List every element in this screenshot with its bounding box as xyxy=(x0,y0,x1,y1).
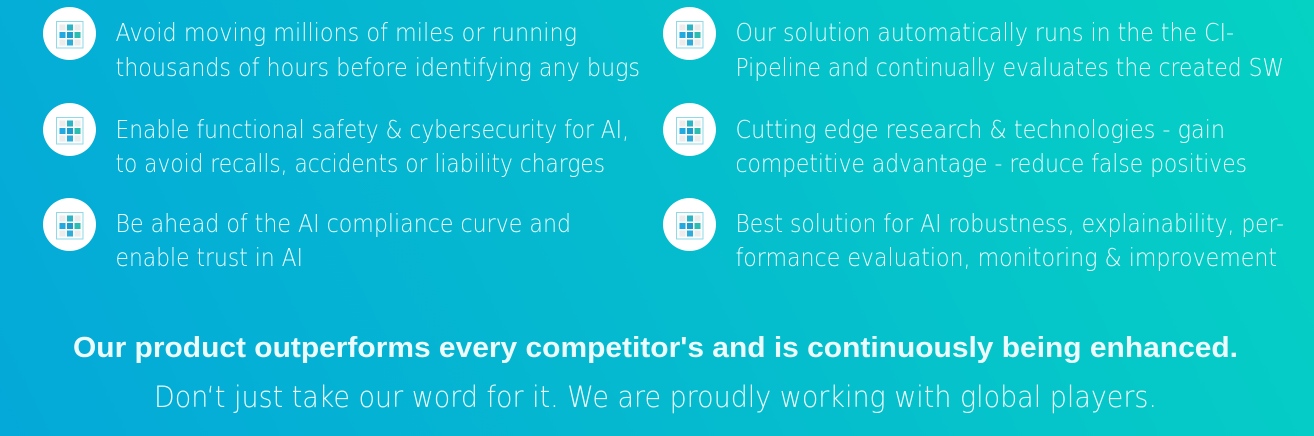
closing statement: bold headline: Our product outperforms every competitor's and is continuously being enhanced. xyxy=(73,332,1238,364)
text: avoid moving millions of miles: Avoid moving millions of miles or running xyxy=(116,18,577,47)
benefit: best solution for AI robustness xyxy=(663,198,1284,272)
text: functional safety: Enable functional safety & cybersecurity for AI, xyxy=(116,115,629,144)
icon: grid badge xyxy=(43,103,96,156)
benefit: functional safety xyxy=(43,103,629,178)
text: cutting edge research: competitive advantage - reduce false positives xyxy=(736,149,1247,178)
benefit: CI pipeline xyxy=(663,7,1284,82)
text: cutting edge research: Cutting edge research & technologies - gain xyxy=(736,115,1225,144)
text: avoid moving millions of miles: thousands of hours before identifying any bugs xyxy=(116,53,640,82)
text: best solution for AI robustness xyxy=(736,209,1284,272)
text: CI pipeline: Our solution automatically runs in the the CI- xyxy=(736,18,1234,47)
benefit: cutting edge research xyxy=(663,103,1247,178)
text: AI compliance: Be ahead of the AI compliance curve and xyxy=(116,209,571,238)
text: AI compliance xyxy=(116,209,571,272)
benefit: avoid moving millions of miles xyxy=(43,7,640,82)
text: AI compliance: enable trust in AI xyxy=(116,243,303,272)
closing statement: subline: Don‘t just take our word for it. We are proudly working with global players. xyxy=(154,380,1157,414)
icon: grid badge xyxy=(663,103,716,156)
text: CI pipeline xyxy=(736,18,1284,82)
text: avoid moving millions of miles xyxy=(116,18,640,82)
text: functional safety xyxy=(116,115,629,178)
icon: grid badge xyxy=(43,198,96,251)
text: cutting edge research xyxy=(736,115,1247,178)
icon: grid badge xyxy=(43,7,96,60)
icon: grid badge xyxy=(663,198,716,251)
text: functional safety: to avoid recalls, accidents or liability charges xyxy=(116,149,605,178)
icon: grid badge xyxy=(663,7,716,60)
benefit: AI compliance xyxy=(43,198,571,272)
